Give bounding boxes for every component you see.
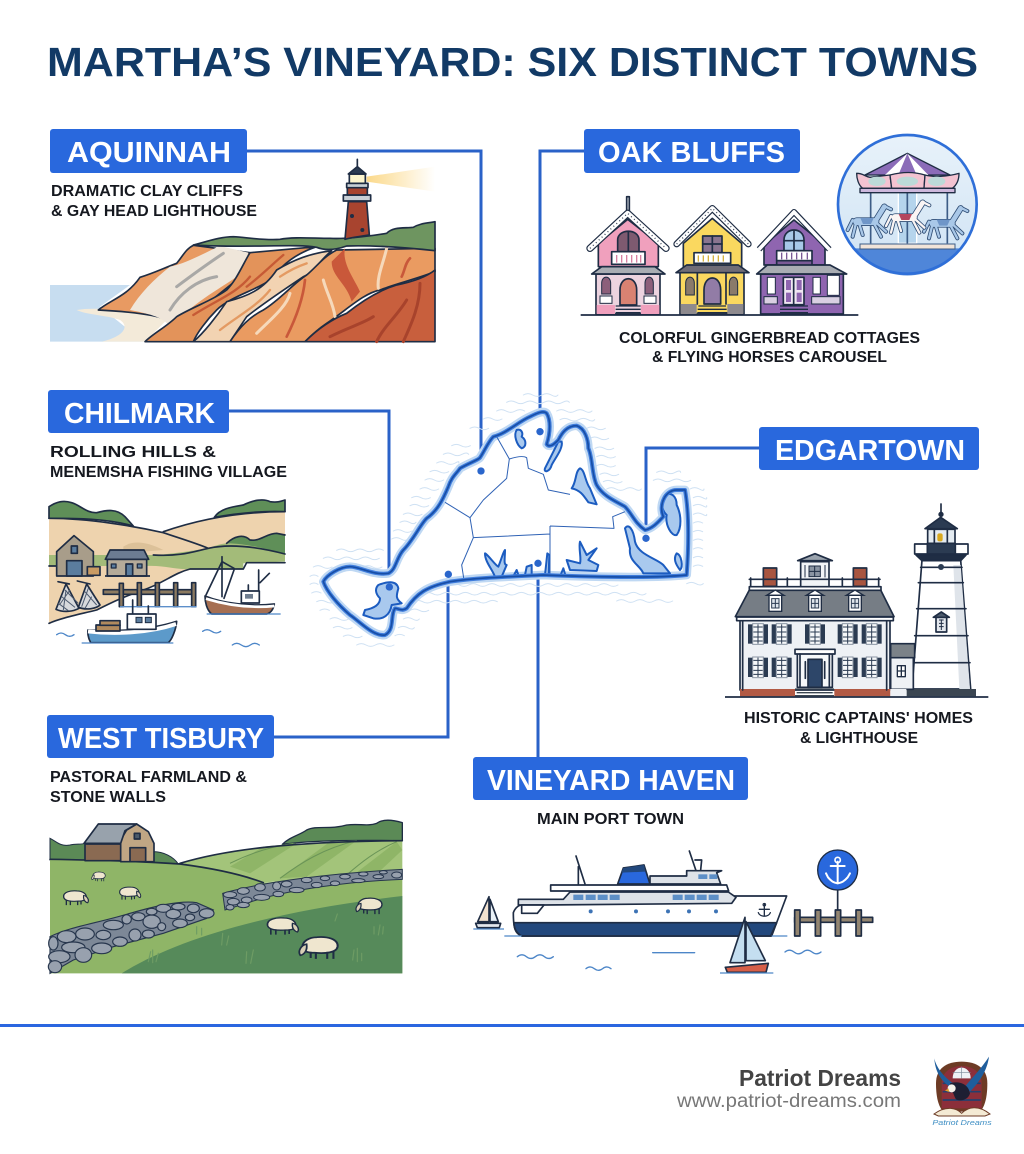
- ground line: [581, 312, 858, 317]
- town borders: [445, 437, 625, 580]
- panel: Edgartown: [725, 427, 988, 747]
- title: MARTHA’S VINEYARD: SIX DISTINCT TOWNS: [47, 39, 978, 85]
- badge: Aquinnah: [50, 129, 247, 173]
- town location dots: [386, 428, 650, 591]
- illustration: rolling hills and fishing village: [49, 500, 285, 647]
- footer: website: www.patriot-dreams.com: [676, 1091, 901, 1112]
- illustration: gingerbread cottages: [581, 197, 858, 315]
- badge: Oak Bluffs: OAK BLUFFS: [598, 137, 785, 169]
- badge: Oak Bluffs: [584, 129, 800, 173]
- badge: West Tisbury: WEST TISBURY: [58, 723, 264, 755]
- anchor sign and dock: [795, 850, 873, 936]
- water ripples: [517, 950, 821, 970]
- ferry: [513, 851, 787, 936]
- badge: Edgartown: [759, 427, 979, 470]
- connector: Edgartown: [646, 448, 759, 538]
- badge: Edgartown: EDGARTOWN: [775, 435, 965, 467]
- badge: Chilmark: CHILMARK: [64, 398, 215, 430]
- island outline: [323, 412, 688, 635]
- badge: Vineyard Haven: [473, 757, 748, 800]
- description: Aquinnah: DRAMATIC CLAY CLIFFS: [51, 183, 243, 200]
- description: Edgartown: & LIGHTHOUSE: [800, 730, 918, 747]
- main house: [735, 554, 906, 696]
- map of Martha's Vineyard: [310, 394, 707, 646]
- badge: Aquinnah: AQUINNAH: [67, 137, 231, 169]
- connector: Chilmark: [229, 411, 389, 587]
- description: Chilmark: MENEMSHA FISHING VILLAGE: [50, 464, 287, 481]
- illustration: ferry, sailboats and anchor sign: [473, 850, 873, 973]
- coastline stroke: [323, 412, 688, 635]
- description: West Tisbury: STONE WALLS: [50, 789, 166, 806]
- footer: brand name: Patriot Dreams: [739, 1065, 901, 1091]
- logo: Patriot Dreams eagle and book: [932, 1057, 992, 1127]
- badge: Vineyard Haven: VINEYARD HAVEN: [487, 765, 735, 797]
- panel: Aquinnah: [50, 129, 435, 342]
- side wing: [891, 644, 915, 689]
- panel: Chilmark: [48, 390, 287, 647]
- pink cottage: [590, 197, 666, 314]
- description: Oak Bluffs: & FLYING HORSES CAROUSEL: [652, 349, 887, 366]
- description: Aquinnah: & GAY HEAD LIGHTHOUSE: [51, 203, 257, 220]
- connector: Oak Bluffs: [540, 151, 584, 432]
- yellow cottage: [676, 208, 749, 314]
- red sailboat: [720, 917, 773, 973]
- purple cottage: [757, 212, 847, 314]
- connector: Aquinnah: [247, 151, 481, 470]
- ponds: [363, 430, 682, 619]
- ground line: [725, 694, 988, 699]
- panel: Vineyard Haven: [473, 757, 873, 973]
- description: West Tisbury: PASTORAL FARMLAND &: [50, 769, 247, 786]
- footer divider: [0, 1024, 1024, 1027]
- connector: West Tisbury: [274, 574, 448, 737]
- illustration: clay cliffs and Gay Head Lighthouse: [50, 159, 435, 342]
- illustration: captain's home and lighthouse: [725, 504, 988, 697]
- panel: West Tisbury: [47, 715, 402, 973]
- panel: Oak Bluffs: [581, 129, 977, 366]
- description: Vineyard Haven: MAIN PORT TOWN: [537, 811, 684, 828]
- description: Oak Bluffs: COLORFUL GINGERBREAD COTTAGES: [619, 330, 920, 347]
- water ripples: [310, 394, 707, 646]
- logo: Patriot Dreams eagle and book: Patriot Dreams: [932, 1118, 992, 1127]
- icon: Flying Horses carousel: [838, 135, 977, 275]
- connector: Vineyard Haven: [536, 563, 540, 757]
- illustration: farmland, sheep and stone walls: [48, 820, 402, 973]
- description: Edgartown: HISTORIC CAPTAINS' HOMES: [744, 710, 973, 727]
- badge: Chilmark: [48, 390, 229, 433]
- description: Chilmark: ROLLING HILLS &: [50, 444, 217, 461]
- small sailboat: [473, 897, 504, 929]
- lighthouse: [907, 504, 976, 696]
